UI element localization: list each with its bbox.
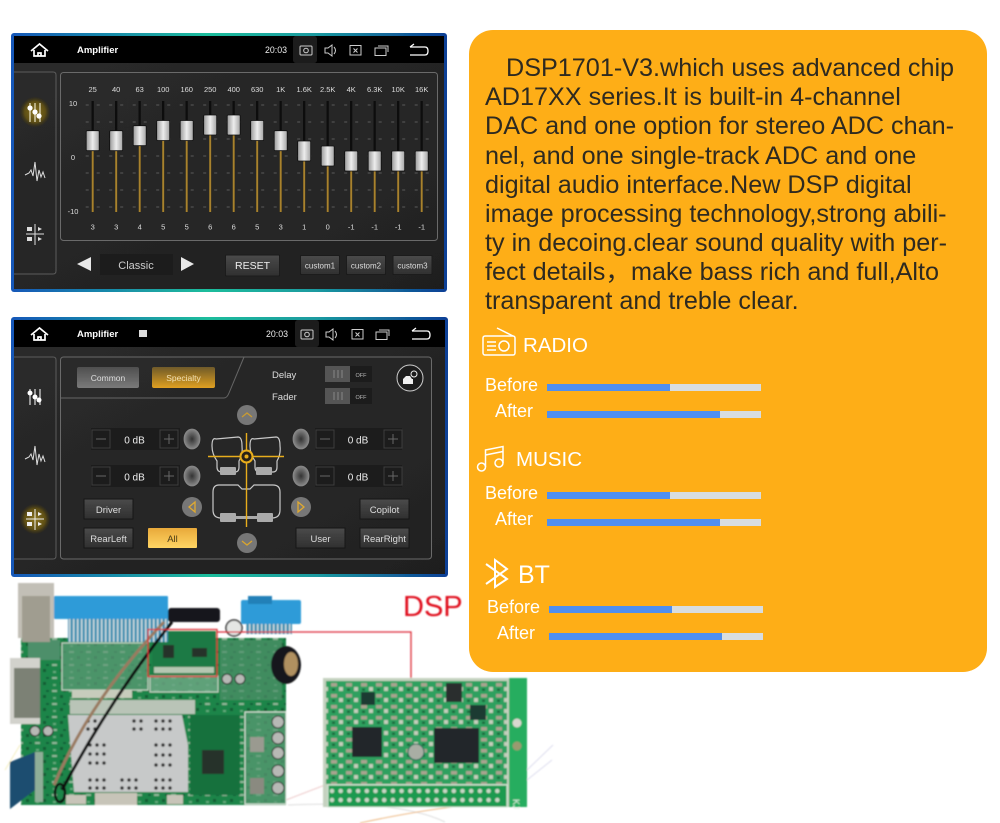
sub-circuits <box>62 643 148 690</box>
frequency labels: 16K <box>415 85 428 94</box>
speaker position buttons <box>84 499 409 548</box>
slider values: -1 <box>348 222 355 232</box>
slider values: 3 <box>91 222 95 232</box>
preset controls <box>77 254 432 276</box>
balance panel <box>60 357 432 559</box>
car seat diagram <box>208 433 284 527</box>
frequency labels: 630 <box>251 85 263 94</box>
delay and fader toggles: Fader <box>272 392 297 403</box>
speaker position buttons: User <box>310 534 331 545</box>
screen: amplifier balance <box>11 317 448 577</box>
slider values: -1 <box>418 222 425 232</box>
slider values: 6 <box>208 222 212 232</box>
top bar: balance screen: Amplifier <box>77 329 118 340</box>
frequency labels: 25 <box>89 85 97 94</box>
speaker position buttons: Driver <box>96 505 121 516</box>
top bar: equalizer screen: 20:03 <box>265 45 287 55</box>
speaker position buttons: RearRight <box>363 534 406 545</box>
delay and fader toggles: OFF <box>356 395 367 401</box>
section: music: After <box>495 509 533 529</box>
section: bluetooth: Before <box>487 597 540 617</box>
slider values <box>91 222 425 232</box>
slider values: 0 <box>326 222 330 232</box>
slider tracks <box>93 101 422 212</box>
dB controls: 0 dB <box>124 436 145 446</box>
delay and fader toggles: OFF <box>356 373 367 379</box>
dB controls: 0 dB <box>348 472 369 484</box>
screen: amplifier equalizer <box>11 33 447 292</box>
slider gold fill <box>93 125 422 212</box>
frequency labels <box>89 85 428 94</box>
side menu: equalizer screen <box>14 72 56 274</box>
frequency labels: 6.3K <box>367 85 382 94</box>
silver shield <box>68 715 188 792</box>
frequency labels: 400 <box>227 85 240 94</box>
equalizer panel <box>60 72 438 240</box>
preset controls: custom1 <box>305 262 336 270</box>
section: radio: After <box>495 401 533 421</box>
speaker position buttons: Copilot <box>370 505 400 516</box>
slider values: 5 <box>185 222 189 232</box>
description text: make bass rich and full,Alto <box>631 258 939 286</box>
mode buttons: Specialty <box>166 373 201 383</box>
slider values: 5 <box>255 222 259 232</box>
DSP label: DSP <box>403 591 463 623</box>
bottom connectors <box>95 793 137 805</box>
frequency labels: 250 <box>204 85 216 94</box>
direction buttons <box>182 405 311 553</box>
top bar: balance screen <box>14 320 445 347</box>
DSP module board <box>323 678 527 810</box>
preset controls: custom3 <box>397 262 428 270</box>
speaker position buttons: RearLeft <box>90 534 127 545</box>
dB controls: 0 dB <box>124 472 145 484</box>
scale labels <box>68 99 78 216</box>
gray connector <box>18 583 54 638</box>
frequency labels: 40 <box>112 85 120 94</box>
frequency labels: 1K <box>276 85 285 94</box>
main board <box>10 583 301 809</box>
section: radio: Before <box>485 375 538 395</box>
top bar: equalizer screen <box>14 36 444 63</box>
description text: nel, and one single-track ADC and one <box>485 142 916 170</box>
slider values: 6 <box>232 222 236 232</box>
section: music <box>478 446 761 529</box>
icons: speakers <box>184 429 309 486</box>
DSP module board: KJ <box>511 799 521 810</box>
slider tick marks <box>86 105 429 207</box>
section: radio: RADIO <box>523 334 588 357</box>
icon: music notes <box>478 446 503 471</box>
description text: fect details， <box>485 258 631 286</box>
slider values: -1 <box>395 222 402 232</box>
description text: DAC and one option for stereo ADC chan- <box>485 112 954 140</box>
DSP highlight box and leader line <box>148 630 411 678</box>
description text: digital audio interface.New DSP digital <box>485 171 912 199</box>
description text: DSP1701-V3.which uses advanced chip <box>506 54 954 82</box>
section: bluetooth: After <box>497 623 535 643</box>
side menu: balance screen <box>14 357 56 559</box>
dB controls: 0 dB <box>348 436 369 446</box>
slider values: 3 <box>279 222 283 232</box>
frequency labels: 100 <box>157 85 169 94</box>
preset controls: RESET <box>235 260 271 272</box>
section: bluetooth: BT <box>518 561 550 589</box>
capacitors and coil <box>226 620 242 636</box>
icon: radio <box>483 328 515 355</box>
frequency labels: 160 <box>180 85 193 94</box>
section: music: MUSIC <box>516 448 582 471</box>
wifi module <box>10 752 35 809</box>
mode buttons <box>77 367 215 388</box>
delay and fader toggles <box>272 366 372 404</box>
slider values: 4 <box>138 222 142 232</box>
description text: AD17XX series.It is built-in 4-channel <box>485 83 901 111</box>
scale labels: 0 <box>71 153 75 162</box>
preset controls: custom2 <box>351 262 382 270</box>
frequency labels: 4K <box>347 85 356 94</box>
icon: bluetooth <box>486 560 507 587</box>
slider handles <box>86 115 428 171</box>
description text: transparent and treble clear. <box>485 287 799 315</box>
icon: car settings <box>397 365 423 391</box>
top bar: equalizer screen: Amplifier <box>77 45 118 56</box>
section: radio <box>483 328 761 421</box>
preset controls: Classic <box>118 260 154 272</box>
frequency labels: 10K <box>392 85 405 94</box>
black connector <box>168 608 220 622</box>
dB controls <box>91 428 402 487</box>
frequency labels: 1.6K <box>296 85 312 94</box>
scale labels: -10 <box>68 207 78 216</box>
blue connectors <box>54 596 168 619</box>
slider values: -1 <box>371 222 378 232</box>
scale labels: 10 <box>69 99 77 108</box>
orange info panel <box>469 30 987 672</box>
antenna cables <box>54 622 164 785</box>
section: music: Before <box>485 483 538 503</box>
description text: image processing technology,strong abili- <box>485 200 947 228</box>
delay and fader toggles: Delay <box>272 370 297 381</box>
speaker position buttons: All <box>167 534 178 545</box>
slider values: 1 <box>302 222 306 232</box>
description text: ty in decoing.clear sound quality with per- <box>485 229 947 257</box>
frequency labels: 63 <box>136 85 144 94</box>
section: bluetooth <box>486 560 763 643</box>
slider values: 5 <box>161 222 165 232</box>
slider values: 3 <box>114 222 118 232</box>
circuit boards photo <box>5 583 553 823</box>
mode buttons: Common <box>91 373 126 383</box>
top bar: balance screen: 20:03 <box>266 329 288 339</box>
decorative light streaks <box>5 745 553 823</box>
description text <box>485 54 954 315</box>
frequency labels: 2.5K <box>320 85 335 94</box>
